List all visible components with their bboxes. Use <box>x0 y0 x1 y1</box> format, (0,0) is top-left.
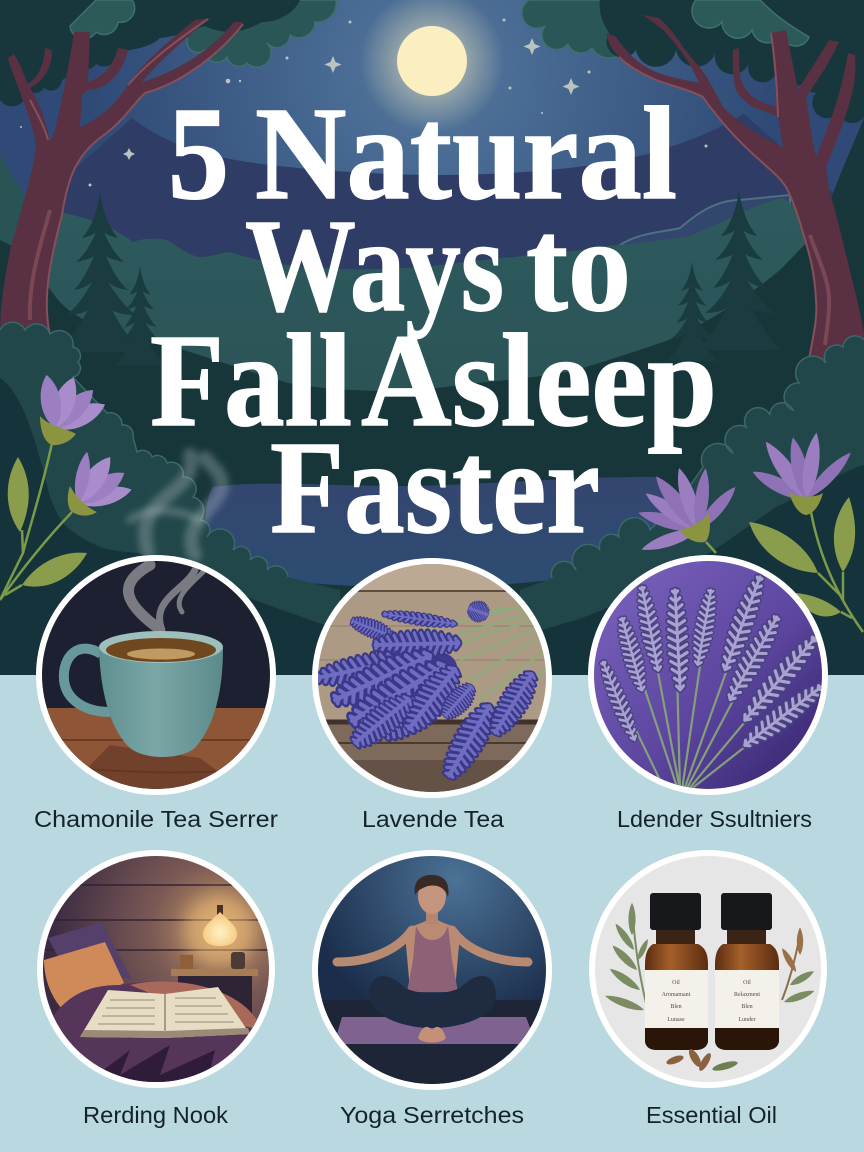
right bottle: Blen <box>741 1004 753 1010</box>
left tree <box>0 18 243 340</box>
right pines <box>672 190 763 338</box>
pillows <box>48 922 132 980</box>
panel: chamomile tea <box>36 555 276 798</box>
label: yoga stretches: Yoga Serretches <box>340 1102 524 1128</box>
hair <box>415 875 448 897</box>
rising steam <box>130 455 222 555</box>
person <box>337 875 528 1042</box>
bedside lamp <box>184 894 256 966</box>
title: Natural <box>255 79 677 227</box>
tank top <box>407 926 458 992</box>
right bottle: Relaxment <box>734 992 760 998</box>
dried seeds <box>665 1047 738 1073</box>
title <box>150 79 717 561</box>
title: 5 <box>168 79 229 227</box>
wooden table <box>46 708 266 789</box>
panel: lavender sprigs <box>588 555 828 795</box>
title: Asleep <box>361 306 717 454</box>
yoga mat <box>334 1017 536 1044</box>
bushes right <box>520 335 864 630</box>
panel: reading nook <box>37 850 275 1090</box>
label: chamomile tea: Chamonile Tea Serrer <box>34 806 278 832</box>
moon <box>360 0 504 133</box>
panel: lavender on wood <box>312 558 556 802</box>
crossed legs <box>369 976 496 1028</box>
left pines <box>70 192 156 340</box>
shoulders <box>405 920 460 990</box>
right tree <box>606 15 864 362</box>
steam <box>128 565 205 630</box>
distant lake <box>206 477 700 587</box>
floor <box>312 1000 552 1090</box>
blanket <box>37 981 275 1090</box>
right lavender flowers <box>636 431 863 632</box>
bushes left <box>0 322 340 624</box>
night sky <box>0 0 864 196</box>
stars <box>20 18 708 186</box>
stems <box>410 606 546 701</box>
wall planks <box>40 885 275 950</box>
right canopy <box>522 0 864 123</box>
title: Ways <box>245 191 504 339</box>
label: essential oil: Essential Oil <box>646 1102 777 1128</box>
label: reading nook: Rerding Nook <box>83 1102 229 1128</box>
left lavender flowers <box>0 373 134 600</box>
right bottle: Lunder <box>738 1017 756 1023</box>
title: to <box>526 191 631 339</box>
far ridge right <box>619 194 791 245</box>
wood planks <box>319 564 545 792</box>
nightstand <box>171 952 258 1014</box>
right bottle: Oil <box>743 980 751 986</box>
neck <box>426 908 438 924</box>
open book <box>80 987 250 1038</box>
right bottle <box>715 893 779 1050</box>
distant mountains <box>64 114 833 270</box>
left edge hill <box>0 155 25 246</box>
label: lavender sprigs: Ldender Ssultniers <box>617 806 812 832</box>
feet <box>418 1027 446 1042</box>
hills <box>48 198 806 391</box>
left bottle: Blen <box>670 1004 682 1010</box>
head <box>418 878 446 914</box>
left bottle: Aromamant <box>662 992 691 998</box>
mug <box>64 631 223 757</box>
stems <box>614 662 822 788</box>
title: Faster <box>270 413 600 561</box>
right edge forest <box>832 118 864 217</box>
dark foreground <box>0 240 816 601</box>
panel: essential oil <box>589 850 827 1088</box>
herb sprigs <box>604 903 816 1020</box>
left canopy <box>0 0 336 106</box>
title: Fall <box>150 306 352 454</box>
left bottle: Oil <box>672 980 680 986</box>
sprig heads <box>597 574 826 752</box>
label: lavender tea: Lavende Tea <box>362 806 504 832</box>
left bottle: Lunase <box>667 1017 685 1023</box>
arms <box>337 930 528 962</box>
lavender mass <box>356 653 458 706</box>
left bottle <box>645 893 708 1050</box>
panel: yoga stretches <box>312 850 552 1090</box>
forest night scene <box>0 0 864 680</box>
lavender flower heads <box>315 600 541 782</box>
